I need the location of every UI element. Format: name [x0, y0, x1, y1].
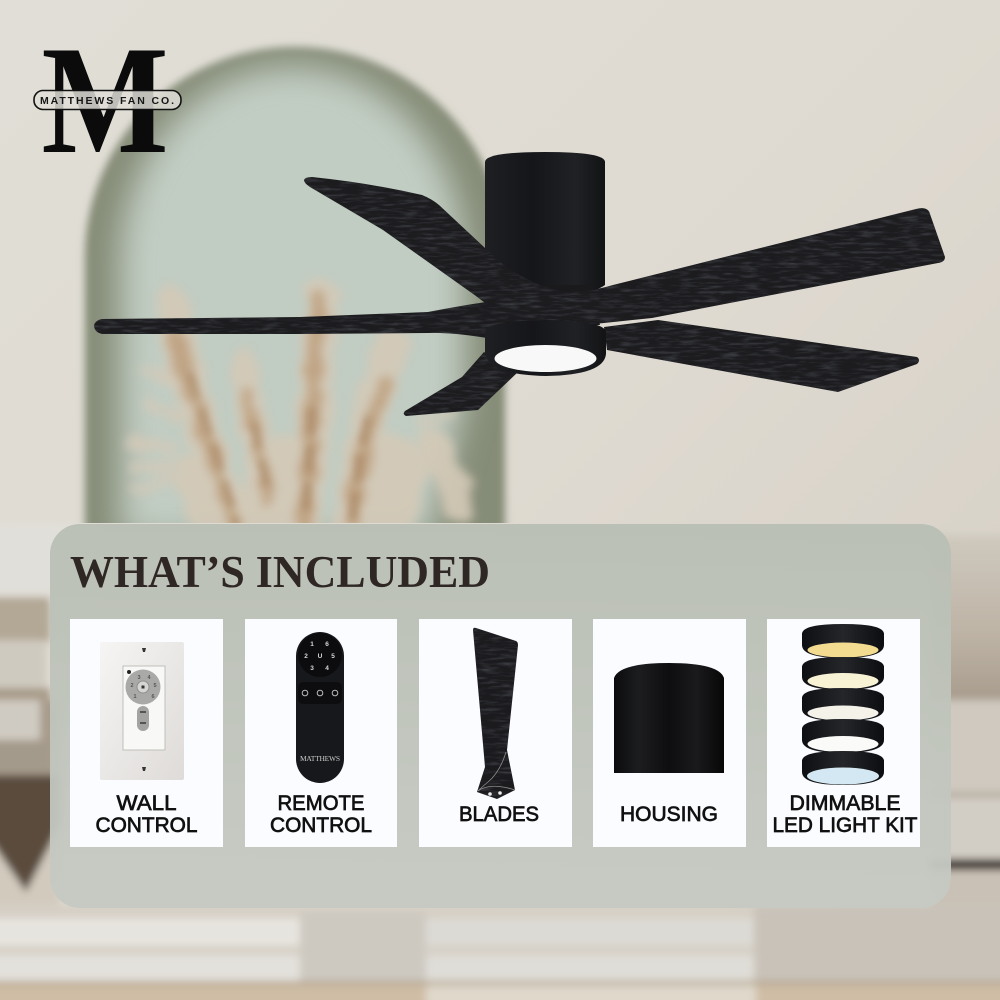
blade: left	[94, 302, 510, 338]
icon: wall control	[100, 642, 184, 780]
label: wall control: WALL	[116, 792, 176, 815]
label: dimmable: DIMMABLE	[790, 792, 900, 815]
arch	[85, 47, 505, 540]
ceiling fan	[94, 152, 945, 416]
icon: wall control: 1	[133, 694, 137, 700]
icon: wall control: 4	[147, 675, 151, 681]
card: housing	[593, 619, 746, 847]
logo band	[34, 90, 181, 110]
icon: housing	[614, 663, 724, 773]
label: LED light kit: LED LIGHT KIT	[772, 814, 918, 837]
icon: remote: 1	[310, 641, 314, 648]
icon: remote: 5	[331, 653, 335, 660]
pampas tan core	[176, 300, 385, 523]
icon: wall control: 6	[151, 694, 155, 700]
heading: WHAT’S INCLUDED	[70, 546, 490, 597]
icon: remote: 2	[304, 653, 308, 660]
fan center mount	[490, 285, 600, 325]
label line two: CONTROL	[270, 814, 372, 837]
blade: upper right	[563, 208, 945, 325]
arch inner glow	[120, 67, 470, 540]
fan LED light	[494, 345, 596, 372]
pampas grass	[133, 295, 470, 530]
logo band text: MATTHEWS FAN CO.	[40, 95, 174, 107]
icon: remote: U	[318, 653, 323, 660]
icon: wall control: 3	[137, 675, 141, 681]
card: dimmable LED light kit	[767, 619, 920, 847]
fan blades	[94, 177, 945, 416]
panel background	[50, 524, 951, 908]
card: remote control	[245, 619, 397, 847]
icon: blade	[473, 628, 518, 799]
background: sofa and floor	[0, 523, 1000, 1000]
panel: what's included	[50, 524, 951, 908]
fan light body	[485, 320, 606, 376]
blade: lower right	[604, 320, 919, 392]
icon: remote	[296, 632, 344, 783]
label: housing: HOUSING	[620, 803, 718, 826]
label: blades: BLADES	[459, 803, 539, 826]
blade: lower left	[404, 352, 518, 416]
arch niche with pampas grass	[85, 47, 505, 540]
label line two: CONTROL	[96, 814, 198, 837]
icon: wall control: 5	[153, 683, 157, 689]
icon: LED stack	[802, 624, 884, 785]
pampas brown strands	[190, 375, 368, 523]
blade: upper left	[304, 177, 564, 322]
logo: Matthews Fan Co.	[34, 14, 181, 186]
card: blades	[419, 619, 572, 847]
icon: remote: 3	[310, 665, 314, 672]
icon: remote: MATTHEWS	[300, 754, 340, 763]
icon: wall control: 2	[130, 683, 134, 689]
label: remote control: REMOTE	[278, 792, 364, 815]
fan housing	[485, 152, 605, 296]
logo letter M: M	[42, 14, 168, 186]
icon: remote: 6	[325, 641, 329, 648]
icon: remote: 4	[325, 665, 329, 672]
pampas pale feathers	[133, 295, 470, 530]
card: wall control	[70, 619, 223, 847]
